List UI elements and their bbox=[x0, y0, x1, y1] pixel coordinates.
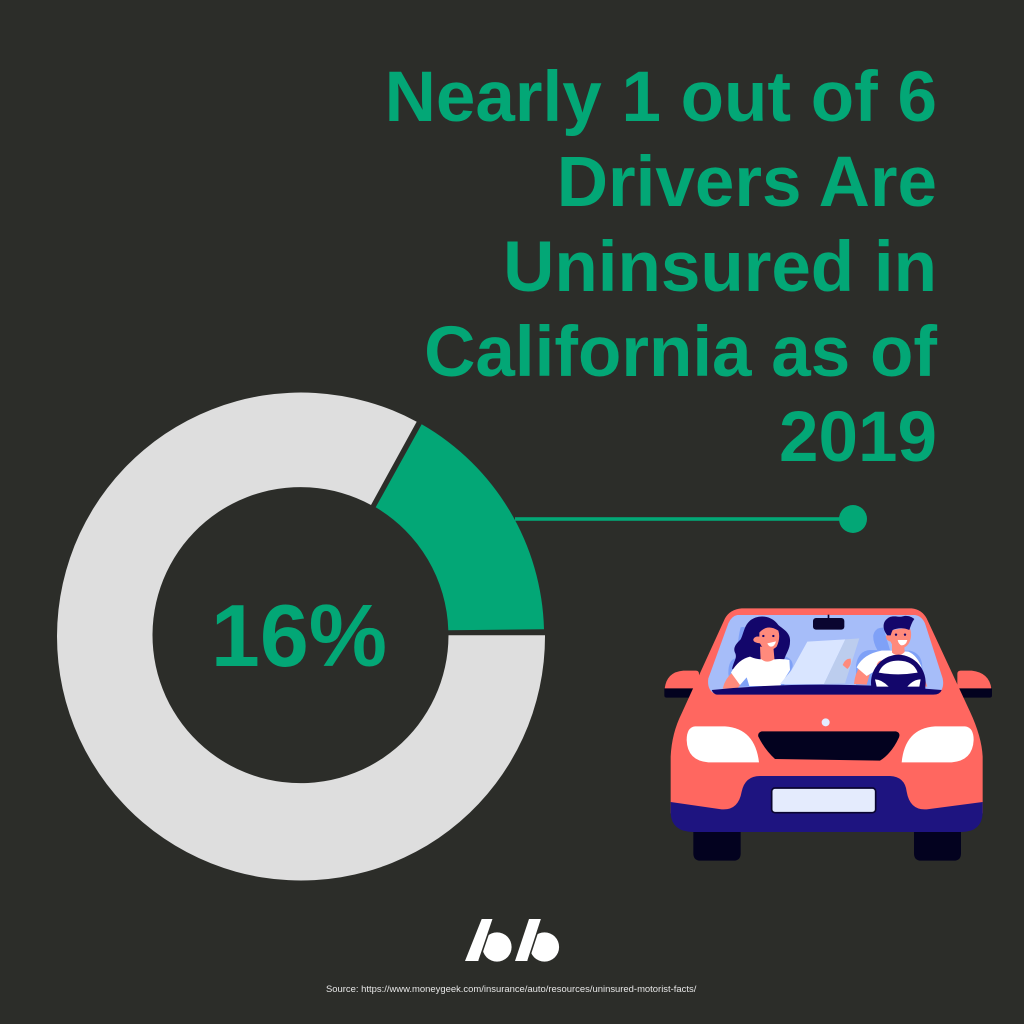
passenger woman bbox=[723, 617, 793, 689]
hood badge bbox=[822, 718, 830, 726]
radiator grille bbox=[758, 731, 899, 761]
title: Nearly 1 out of 6 bbox=[385, 58, 937, 137]
dashboard edge bbox=[712, 685, 942, 695]
headlights bbox=[687, 726, 974, 762]
driver man bbox=[854, 616, 927, 687]
steering wheel bbox=[871, 655, 926, 694]
windshield bbox=[708, 615, 943, 694]
title: California as of bbox=[424, 313, 937, 392]
side mirrors bbox=[664, 671, 992, 698]
donut value label: 16% bbox=[211, 586, 387, 685]
rearview mirror bbox=[813, 615, 844, 630]
license plate bbox=[772, 788, 876, 813]
donut segment: insured 84% bbox=[57, 393, 545, 881]
source note: Source: https://www.moneygeek.com/insurance/auto/resources/uninsured-motorist-facts/ bbox=[326, 984, 696, 995]
road map held by passenger bbox=[780, 638, 859, 684]
car body bbox=[671, 608, 983, 813]
title: Uninsured in bbox=[503, 228, 937, 307]
wheels bbox=[693, 828, 961, 861]
title: Drivers Are bbox=[557, 143, 937, 222]
title bbox=[385, 58, 938, 477]
lower bumper bbox=[671, 776, 983, 832]
title: 2019 bbox=[779, 398, 937, 477]
donut segment: uninsured 16% bbox=[376, 424, 544, 630]
